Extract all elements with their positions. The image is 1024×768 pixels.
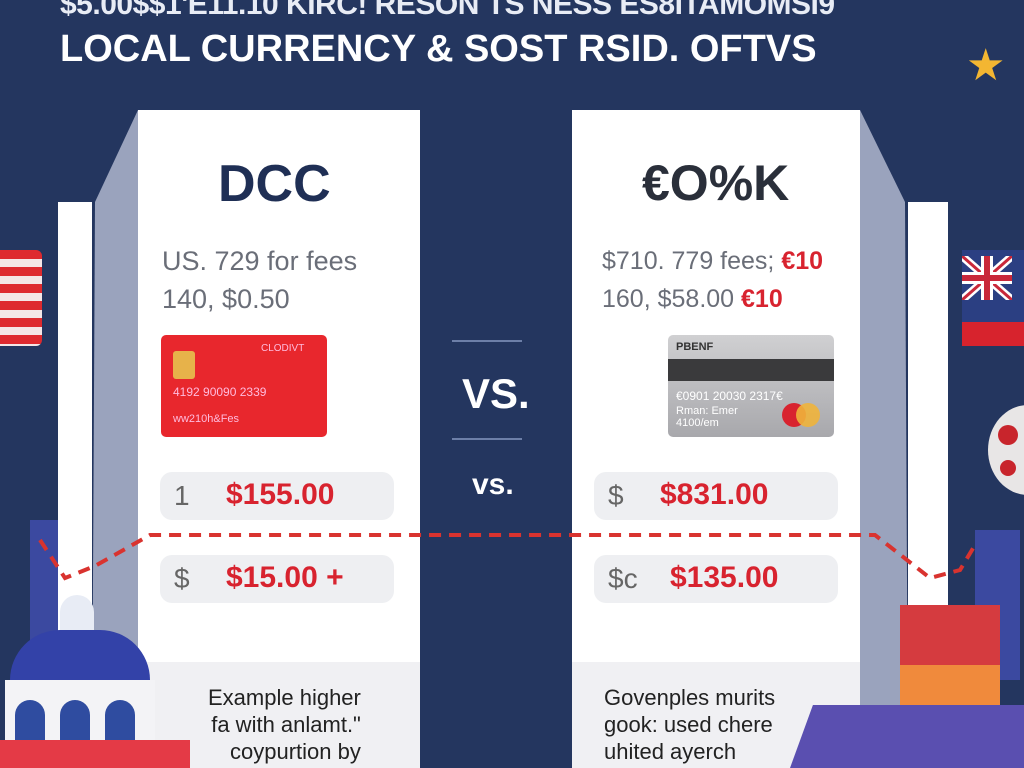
text: fees: $710. 779 fees; €10 (602, 247, 823, 275)
amount 1: $ (608, 480, 624, 511)
text: fees (602, 247, 823, 313)
amount 1 (160, 472, 394, 520)
text: example: uhited ayerch (604, 739, 736, 764)
amount 1 (594, 472, 838, 520)
text: example: coypurtion by (230, 739, 361, 764)
heading: DCC: DCC (218, 155, 331, 213)
text: example: Example higher (208, 685, 361, 710)
text: fees: 140, $0.50 (162, 284, 290, 314)
text: example: gook: used chere (604, 712, 773, 737)
amount 2: $c (608, 563, 638, 594)
amount 2 (594, 555, 838, 603)
icon: coin circle (988, 405, 1024, 495)
building left (0, 595, 190, 768)
title (60, 0, 835, 70)
icon: red credit card: 4192 90090 2339 (173, 385, 266, 399)
heading: local: €O%K (642, 155, 789, 211)
building right (790, 605, 1024, 768)
panel: DCC (138, 110, 420, 768)
icon: gray card: Rman: Emer (676, 405, 738, 417)
text: fees: US. 729 for fees (162, 246, 357, 276)
icon: gray card (668, 335, 834, 437)
icon: red credit card: ww210h&Fes (173, 413, 239, 425)
amount 1: $155.00 (226, 478, 334, 511)
panel: local currency (572, 110, 860, 768)
title: LOCAL CURRENCY & SOST RSID. OFTVS (60, 28, 817, 70)
text: example (208, 685, 361, 768)
vs label: vs. (472, 468, 514, 501)
amount 2 (160, 555, 394, 603)
icon: US flag (0, 250, 42, 346)
vs label (452, 340, 530, 501)
text: fees: 160, $58.00 €10 (602, 285, 783, 313)
icon: red credit card: CLODIVT (261, 343, 304, 354)
icon: star: ★ (966, 41, 1005, 90)
icon: red credit card (161, 335, 327, 437)
text: example: Govenples murits (604, 685, 775, 710)
text: fees (162, 246, 357, 314)
text: example (604, 685, 775, 768)
amount 2: $135.00 (670, 561, 778, 594)
text: example: fa with anlamt." (211, 712, 361, 737)
amount 2: $ (174, 563, 190, 594)
amount 1: $831.00 (660, 478, 768, 511)
icon: gray card: PBENF (676, 341, 713, 353)
icon: gray card: 4100/em (676, 417, 719, 429)
icon: UK flag (962, 250, 1024, 346)
amount 2: $15.00 + (226, 561, 344, 594)
vs label: VS. (462, 370, 530, 417)
icon: gray card: €0901 20030 2317€ (676, 389, 783, 403)
amount 1: 1 (174, 480, 190, 511)
